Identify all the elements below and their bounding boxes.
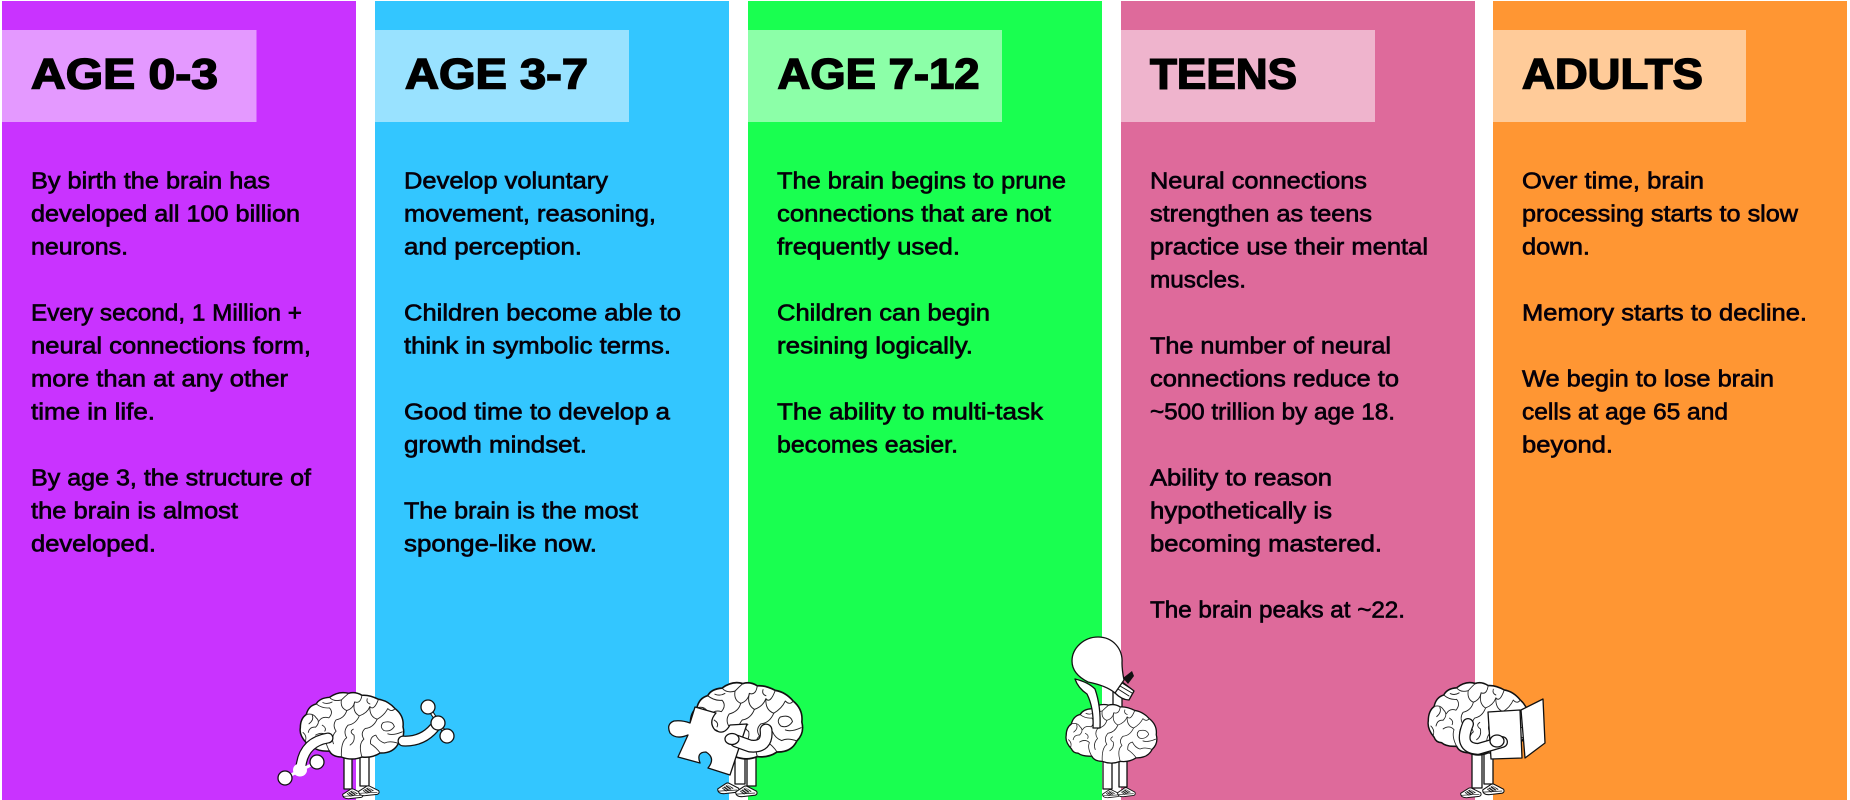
text block: adults facts: cells at age 65 and xyxy=(1522,399,1728,425)
panel: age 0-3 xyxy=(2,1,356,800)
text block: age 3-7 facts: growth mindset. xyxy=(404,432,587,458)
text block: teens facts: connections reduce to xyxy=(1150,366,1399,392)
text block: adults facts: Memory starts to decline. xyxy=(1522,300,1807,326)
heading: adults xyxy=(1493,30,1746,122)
text block: age 3-7 facts: sponge-like now. xyxy=(404,531,597,557)
text block: teens facts: becoming mastered. xyxy=(1150,531,1382,557)
heading: adults: ADULTS xyxy=(1522,50,1703,98)
text block: teens facts xyxy=(1150,168,1428,623)
heading: age 7-12: AGE 7-12 xyxy=(778,50,980,98)
text block: age 0-3 facts: the brain is almost xyxy=(31,498,239,524)
text block: age 7-12 facts: frequently used. xyxy=(777,234,960,260)
text block: age 7-12 facts: connections that are not xyxy=(777,201,1052,227)
text block: age 3-7 facts: movement, reasoning, xyxy=(404,201,656,227)
heading: teens: TEENS xyxy=(1150,50,1297,98)
icon: brain carrying puzzle piece xyxy=(669,683,803,797)
heading: age 3-7: AGE 3-7 xyxy=(405,50,588,98)
text block: adults facts: processing starts to slow xyxy=(1522,201,1798,227)
text block: age 0-3 facts: By birth the brain has xyxy=(31,168,270,194)
text block: teens facts: practice use their mental xyxy=(1150,234,1428,260)
icon: brain reading book xyxy=(1428,683,1545,798)
text block: teens facts: hypothetically is xyxy=(1150,498,1332,524)
icon: brain holding lightbulb xyxy=(1066,637,1157,798)
text block: age 3-7 facts xyxy=(404,168,681,557)
text block: teens facts: The number of neural xyxy=(1150,333,1391,359)
text block: teens facts: Ability to reason xyxy=(1150,465,1332,491)
text block: adults facts: beyond. xyxy=(1522,432,1613,458)
text block: age 0-3 facts: Every second, 1 Million + xyxy=(31,300,302,326)
text block: age 0-3 facts xyxy=(31,168,312,557)
heading: teens xyxy=(1121,30,1375,122)
text block: teens facts: The brain peaks at ~22. xyxy=(1150,597,1405,623)
text block: age 7-12 facts: The ability to multi-task xyxy=(777,399,1044,425)
text block: adults facts: We begin to lose brain xyxy=(1522,366,1774,392)
text block: age 0-3 facts: time in life. xyxy=(31,399,155,425)
heading: age 0-3: AGE 0-3 xyxy=(31,50,218,98)
text block: adults facts: down. xyxy=(1522,234,1590,260)
text block: teens facts: strengthen as teens xyxy=(1150,201,1372,227)
heading: age 3-7 xyxy=(375,30,629,122)
text block: age 7-12 facts: The brain begins to prune xyxy=(777,168,1066,194)
text block: age 0-3 facts: developed. xyxy=(31,531,156,557)
text block: age 7-12 facts: resining logically. xyxy=(777,333,973,359)
text block: age 0-3 facts: more than at any other xyxy=(31,366,288,392)
text block: age 3-7 facts: Develop voluntary xyxy=(404,168,609,194)
icon: brain lifting dumbbells xyxy=(278,693,454,799)
text block: age 0-3 facts: By age 3, the structure of xyxy=(31,465,312,491)
text block: teens facts: Neural connections xyxy=(1150,168,1367,194)
text block: age 0-3 facts: developed all 100 billion xyxy=(31,201,300,227)
panel: teens xyxy=(1121,1,1475,800)
text block: adults facts xyxy=(1522,168,1807,458)
text block: teens facts: ~500 trillion by age 18. xyxy=(1150,399,1395,425)
text block: age 0-3 facts: neurons. xyxy=(31,234,128,260)
text block: age 3-7 facts: Good time to develop a xyxy=(404,399,670,425)
text block: age 3-7 facts: The brain is the most xyxy=(404,498,639,524)
heading: age 7-12 xyxy=(748,30,1002,122)
panel: age 7-12 xyxy=(748,1,1102,800)
panel: age 3-7 xyxy=(375,1,729,800)
text block: age 3-7 facts: Children become able to xyxy=(404,300,681,326)
text block: age 7-12 facts: becomes easier. xyxy=(777,432,958,458)
text block: teens facts: muscles. xyxy=(1150,267,1246,293)
text block: age 3-7 facts: and perception. xyxy=(404,234,582,260)
text block: age 7-12 facts xyxy=(777,168,1066,458)
text block: adults facts: Over time, brain xyxy=(1522,168,1704,194)
text block: age 3-7 facts: think in symbolic terms. xyxy=(404,333,671,359)
panel: adults xyxy=(1493,1,1847,800)
text block: age 7-12 facts: Children can begin xyxy=(777,300,990,326)
text block: age 0-3 facts: neural connections form, xyxy=(31,333,311,359)
heading: age 0-3 xyxy=(2,30,256,122)
